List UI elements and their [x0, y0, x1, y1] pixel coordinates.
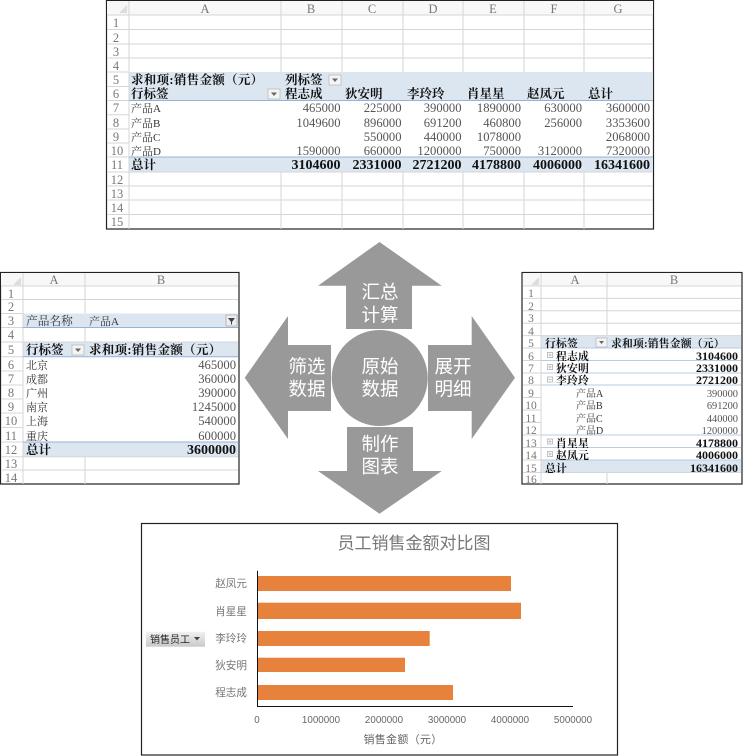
row numbers: 11 [111, 158, 123, 172]
data rows [131, 101, 650, 158]
row numbers: 2 [528, 301, 534, 313]
circle: source data [332, 330, 428, 426]
employee rows: 3104600 [696, 349, 738, 363]
data rows: 896000 [364, 116, 402, 130]
report filter row: 产品A [89, 314, 119, 328]
row numbers: 10 [5, 414, 17, 428]
row numbers: 15 [525, 463, 537, 475]
row numbers: 10 [525, 400, 537, 412]
category labels: 李玲玲 [215, 632, 247, 645]
data rows: 256000 [544, 116, 582, 130]
row numbers [111, 16, 124, 229]
employee rows: 程志成 [556, 349, 589, 363]
employee rows: 4006000 [696, 448, 738, 462]
data rows: 重庆 [26, 429, 48, 443]
category labels: 程志成 [215, 686, 247, 699]
arrow: left, filter [245, 316, 331, 439]
row numbers: 5 [528, 338, 534, 350]
row numbers: 1 [113, 16, 119, 30]
data rows: 2068000 [606, 130, 650, 144]
panel: expanded pivot table [522, 272, 742, 486]
row numbers: 13 [111, 187, 123, 201]
arrow: up, summarize [318, 242, 442, 329]
row numbers: 13 [5, 457, 17, 471]
column headers: A [200, 2, 210, 16]
arrow: right, expand: 展开 [434, 356, 472, 377]
x axis title: 销售金额（元） [363, 732, 443, 746]
row numbers: 2 [8, 300, 14, 314]
x axis tick labels [254, 715, 593, 726]
data rows: 3600000 [606, 101, 650, 115]
row numbers: 6 [8, 358, 14, 372]
employee rows: 赵凤元 [556, 448, 589, 462]
column headers: D [428, 2, 438, 16]
column headers: C [368, 2, 376, 16]
category labels: 赵凤元 [215, 577, 247, 590]
data rows: 600000 [198, 429, 236, 443]
x axis tick labels: 3000000 [428, 715, 467, 726]
row numbers: 1 [8, 287, 14, 301]
row numbers: 14 [111, 201, 124, 215]
row numbers: 6 [528, 351, 534, 363]
pivot header labels: 求和项:销售金额（元） [611, 336, 725, 350]
circle: source data: 数据 [361, 378, 399, 400]
expanded product rows: 1200000 [702, 426, 738, 437]
data rows: 上海 [26, 414, 48, 428]
grand total row: 4178800 [472, 158, 521, 173]
pivot header labels [26, 342, 221, 357]
pivot header labels: 李玲玲 [407, 86, 445, 101]
data rows: 1200000 [417, 144, 462, 158]
pivot header labels: 求和项:销售金额（元） [89, 342, 221, 357]
data rows: 691200 [424, 116, 462, 130]
panel: bar chart [142, 524, 618, 755]
column headers: G [613, 2, 623, 16]
row numbers [5, 287, 18, 485]
x axis tick labels: 4000000 [491, 715, 530, 726]
pivot header labels [131, 72, 614, 101]
employee rows: 肖星星 [556, 436, 589, 450]
category labels [215, 577, 247, 699]
data rows: 1049600 [296, 116, 340, 130]
data rows: 390000 [424, 101, 462, 115]
grand total row [131, 157, 650, 173]
data rows: 产品A [131, 101, 161, 115]
row numbers: 13 [525, 438, 537, 450]
employee rows: 李玲玲 [556, 373, 589, 387]
data rows: 390000 [198, 386, 236, 400]
data rows: 750000 [483, 144, 521, 158]
arrow: up, summarize: 计算 [361, 304, 399, 326]
pivot header labels: 行标签 [26, 342, 64, 357]
employee rows: 狄安明 [556, 361, 589, 375]
data rows: 660000 [364, 144, 402, 158]
row numbers: 7 [8, 372, 14, 386]
expanded product rows: 产品A [576, 387, 604, 400]
field button: sales staff [146, 632, 205, 647]
row numbers: 3 [113, 45, 119, 59]
diagram: center hub with four arrows [245, 242, 515, 514]
pivot header labels: 行标签 [131, 86, 169, 101]
column headers [570, 273, 678, 287]
employee rows: 2721200 [696, 373, 738, 387]
employee rows: 2331000 [696, 361, 738, 375]
arrow: right, expand: 明细 [434, 378, 472, 400]
arrow: down, chart: 制作 [361, 434, 399, 454]
pivot header labels: 狄安明 [345, 86, 383, 101]
employee rows: 4178800 [696, 436, 738, 450]
field button: sales staff: 销售员工 [150, 633, 190, 646]
row numbers: 7 [113, 101, 119, 115]
grand total row: 4006000 [533, 158, 582, 173]
row numbers: 5 [113, 73, 119, 87]
expanded product rows: 691200 [707, 401, 738, 412]
row numbers: 8 [8, 386, 14, 400]
row numbers [525, 288, 537, 486]
column headers: B [307, 2, 315, 16]
column headers [200, 2, 623, 16]
grand total row [545, 461, 738, 475]
row numbers: 9 [528, 388, 534, 400]
data rows: 465000 [303, 101, 340, 115]
data rows: 3353600 [606, 116, 650, 130]
x axis tick labels: 0 [254, 715, 260, 726]
data rows: 南京 [26, 400, 48, 414]
data rows: 1078000 [477, 130, 521, 144]
column headers: F [551, 2, 558, 16]
pivot header labels: 求和项:销售金额（元） [131, 72, 263, 87]
data rows: 产品C [131, 130, 160, 144]
data rows: 550000 [364, 130, 402, 144]
data rows: 460800 [483, 116, 521, 130]
data rows: 540000 [198, 414, 236, 428]
grand total row: 3104600 [292, 158, 340, 173]
category labels: 狄安明 [215, 659, 247, 672]
data rows: 1890000 [477, 101, 521, 115]
row numbers: 11 [5, 429, 17, 443]
row numbers: 7 [528, 363, 534, 375]
column headers: E [489, 2, 497, 16]
data rows: 465000 [198, 358, 236, 372]
data rows: 产品D [131, 144, 161, 158]
data rows: 225000 [364, 101, 402, 115]
column headers: A [570, 273, 580, 287]
expanded product rows: 产品B [576, 399, 603, 412]
grand total row: 16341600 [690, 461, 738, 475]
column headers: B [670, 273, 678, 287]
report filter row [26, 314, 237, 328]
arrow: down, chart [318, 427, 442, 514]
row numbers: 3 [8, 314, 14, 328]
arrow: right, expand [428, 316, 515, 439]
expanded product rows: 产品D [576, 424, 603, 437]
row numbers: 11 [525, 413, 537, 425]
row numbers: 1 [528, 288, 534, 300]
category labels: 肖星星 [215, 605, 247, 618]
pivot header labels: 总计 [588, 86, 614, 101]
x axis tick labels: 1000000 [302, 715, 341, 726]
pivot header labels: 肖星星 [467, 86, 505, 101]
row numbers: 10 [111, 144, 123, 158]
grand total row [26, 442, 236, 458]
row numbers: 9 [8, 400, 14, 414]
row numbers: 2 [113, 31, 119, 45]
data rows: 产品B [131, 116, 160, 130]
arrow: left, filter: 筛选 [288, 356, 326, 377]
data rows: 630000 [544, 101, 582, 115]
bars [258, 576, 521, 700]
row numbers: 12 [525, 425, 537, 437]
x axis tick labels: 5000000 [554, 715, 593, 726]
grand total row: 3600000 [187, 443, 236, 458]
employee rows [548, 349, 738, 462]
grand total row: 总计 [26, 442, 52, 457]
column headers [49, 273, 165, 287]
pivot header labels: 赵凤元 [527, 86, 565, 101]
arrow: down, chart: 图表 [361, 456, 399, 477]
data rows: 成都 [26, 372, 48, 386]
data rows: 7320000 [606, 144, 650, 158]
column headers: A [49, 273, 59, 287]
row numbers: 12 [5, 443, 17, 457]
pivot header labels: 行标签 [545, 336, 578, 350]
row numbers: 5 [8, 343, 14, 357]
row numbers: 4 [8, 328, 15, 342]
row numbers: 8 [113, 116, 119, 130]
grand total row: 16341600 [594, 158, 650, 173]
data rows: 440000 [424, 130, 462, 144]
grand total row: 2331000 [352, 158, 402, 173]
row numbers: 14 [5, 471, 18, 485]
pivot header labels [545, 336, 725, 350]
data rows: 1245000 [192, 400, 236, 414]
expanded product rows [576, 387, 738, 437]
column headers: B [157, 273, 165, 287]
grand total row: 总计 [545, 461, 567, 475]
expanded product rows: 产品C [576, 412, 603, 425]
row numbers: 3 [528, 313, 534, 325]
grand total row: 2721200 [412, 158, 462, 173]
data rows [26, 358, 236, 443]
pivot header labels: 程志成 [285, 86, 323, 101]
row numbers: 8 [528, 375, 534, 387]
row numbers: 4 [528, 326, 534, 338]
data rows: 1590000 [296, 144, 340, 158]
pivot header labels: 列标签 [285, 72, 323, 87]
row numbers: 4 [113, 59, 120, 73]
data rows: 北京 [26, 358, 48, 372]
data rows: 360000 [198, 372, 236, 386]
expanded product rows: 440000 [707, 414, 738, 425]
expanded product rows: 390000 [707, 389, 738, 400]
row numbers: 14 [525, 450, 537, 462]
grand total row: 总计 [131, 157, 157, 172]
axes [258, 571, 573, 706]
x axis tick labels: 2000000 [365, 715, 404, 726]
chart title: 员工销售金额对比图 [338, 534, 490, 553]
arrow: up, summarize: 汇总 [361, 282, 399, 302]
data rows: 3120000 [538, 144, 582, 158]
row numbers: 16 [525, 474, 537, 486]
row numbers: 15 [111, 215, 123, 229]
report filter row: 产品名称 [26, 314, 73, 328]
row numbers: 12 [111, 173, 123, 187]
circle: source data: 原始 [361, 356, 399, 377]
arrow: left, filter: 数据 [288, 378, 326, 400]
data rows: 广州 [26, 386, 48, 400]
panel: summary pivot table [106, 0, 654, 229]
panel: filtered pivot table [0, 272, 239, 485]
row numbers: 6 [113, 87, 119, 101]
row numbers: 9 [113, 130, 119, 144]
